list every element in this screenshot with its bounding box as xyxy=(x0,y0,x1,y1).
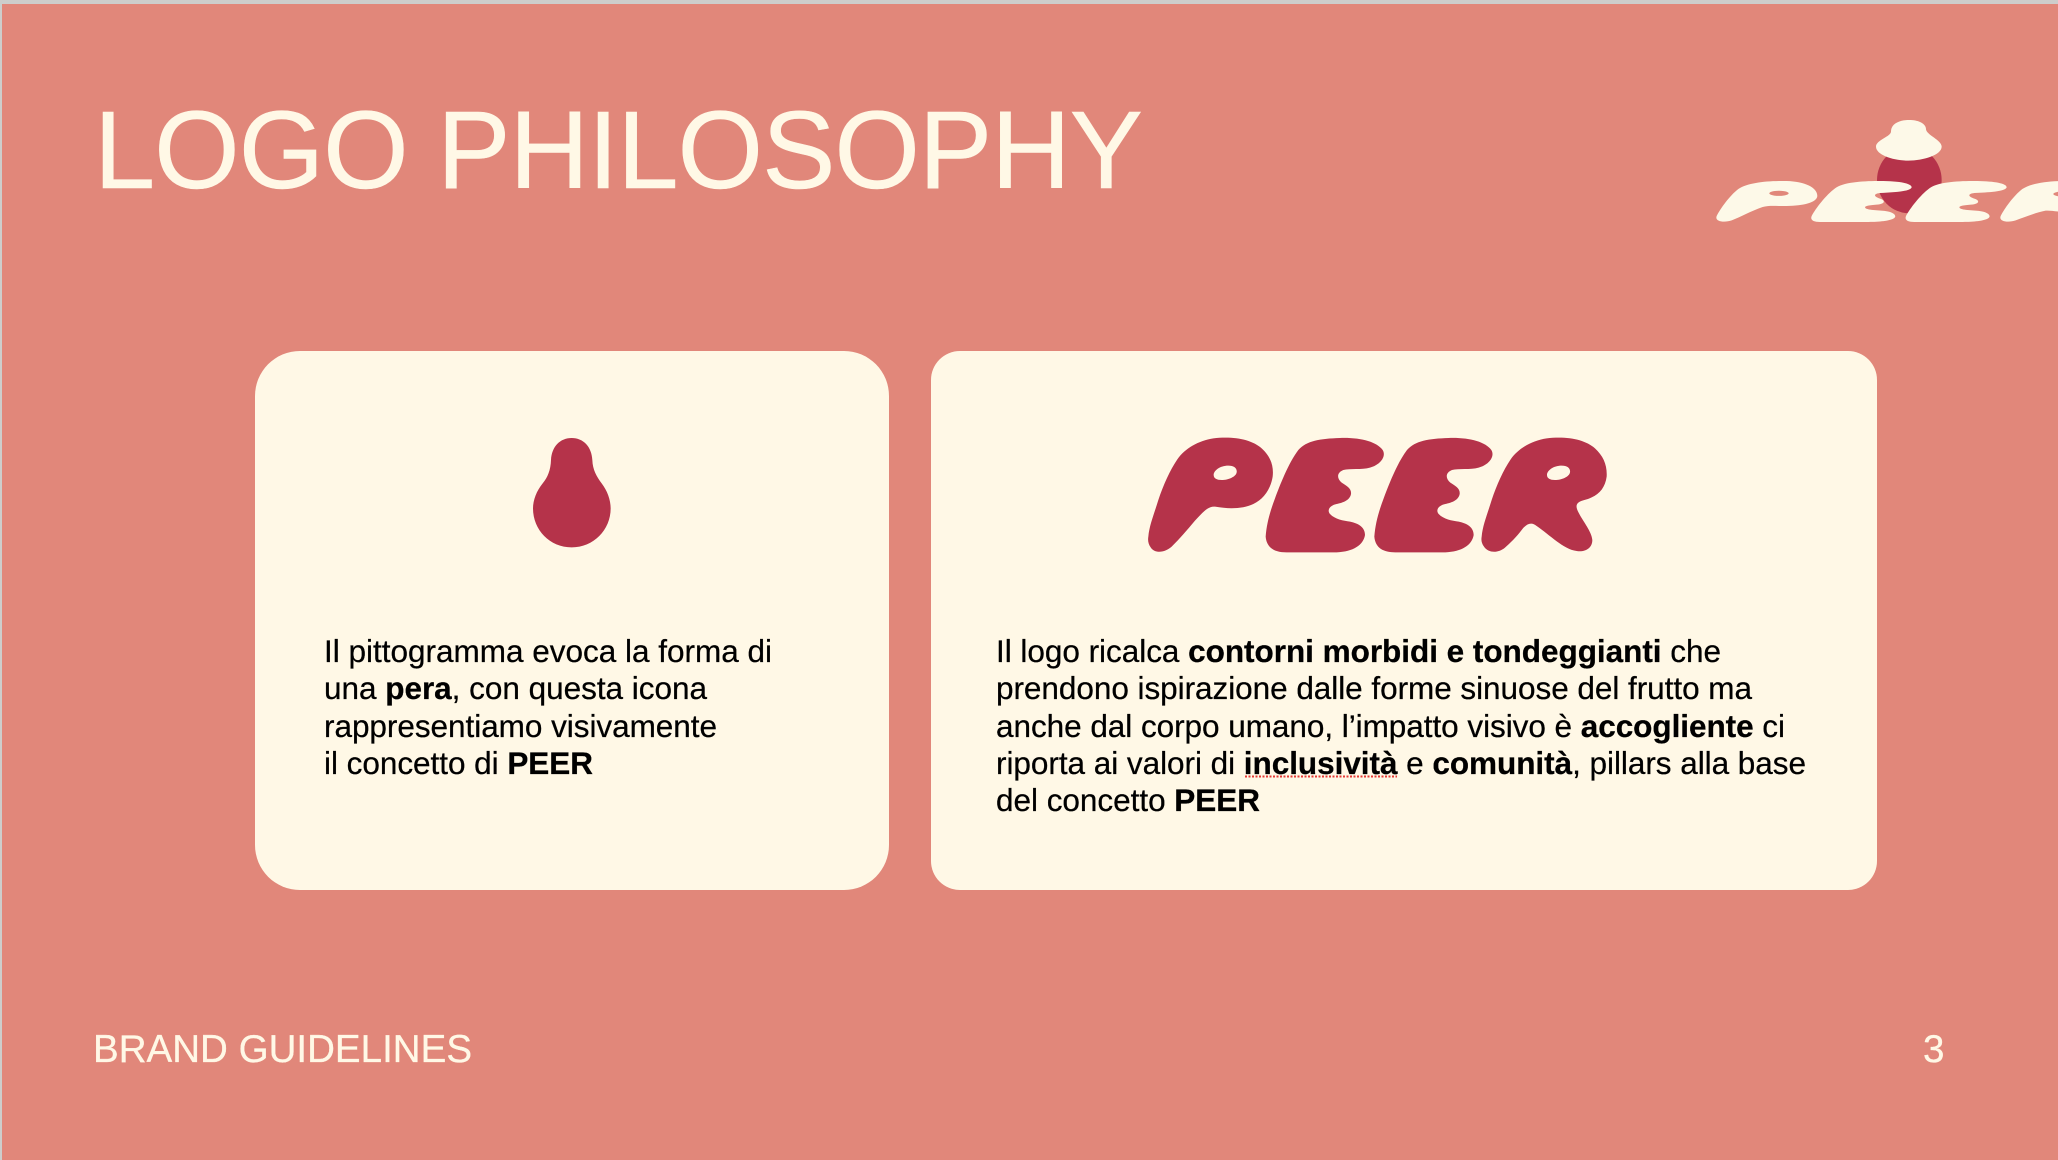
text: pictogram description xyxy=(324,633,772,781)
text: logotype description: prendono ispirazione dalle forme sinuose del frutto ma xyxy=(996,670,1752,706)
text: pictogram description: rappresentiamo visivamente xyxy=(324,708,717,744)
spell-check underline xyxy=(1245,776,1397,778)
text: logotype description xyxy=(996,633,1806,818)
text: logotype description: anche dal corpo umano, l’impatto visivo è accogliente ci xyxy=(996,708,1785,744)
title: LOGO PHILOSOPHY xyxy=(94,89,1143,212)
panel: logotype xyxy=(931,351,1877,890)
text: pictogram description: Il pittogramma evoca la forma di xyxy=(324,633,772,669)
page number: 3 xyxy=(1923,1028,1944,1071)
logo: PEER wordmark xyxy=(1148,438,1607,552)
header logo: pear and PEER wordmark xyxy=(1716,120,2058,222)
text: pictogram description: il concetto di PEER xyxy=(324,745,593,781)
icon: pear xyxy=(533,438,611,547)
text: logotype description: del concetto PEER xyxy=(996,782,1260,818)
panel: pictogram xyxy=(255,351,889,890)
text: logotype description: Il logo ricalca contorni morbidi e tondeggianti che xyxy=(996,633,1721,669)
footer label: BRAND GUIDELINES xyxy=(93,1028,472,1071)
text: logotype description: riporta ai valori di inclusività e comunità, pillars alla base xyxy=(996,745,1806,781)
text: pictogram description: una pera, con questa icona xyxy=(324,670,707,706)
